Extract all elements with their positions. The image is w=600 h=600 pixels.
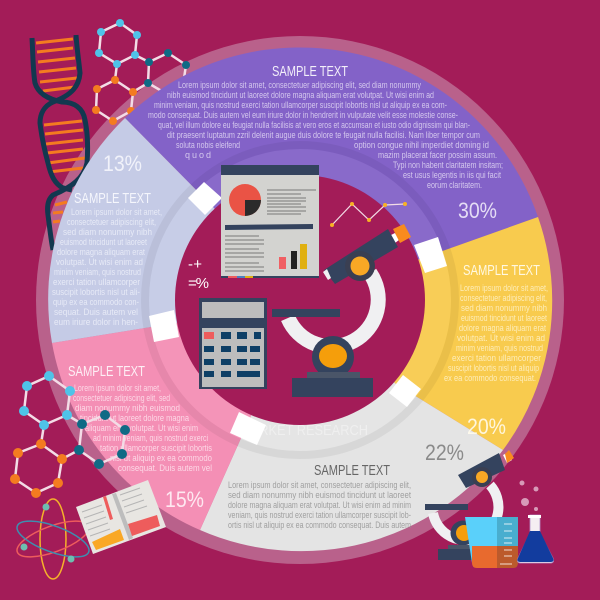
grey body text: sed diam nonummy nibh euismod tincidunt ut laoreet — [228, 490, 411, 500]
yellow heading: SAMPLE TEXT — [463, 262, 540, 279]
lavender body text — [52, 207, 162, 327]
purple body text: quod — [185, 150, 211, 160]
icon: beaker — [465, 517, 518, 568]
yellow body text: exerci tation ullamcorper — [452, 353, 541, 363]
yellow body text: ex ea commodo consequat. — [444, 373, 536, 383]
purple body text: mazim placerat facer possim assum. — [378, 150, 497, 160]
segment: purple 30% — [125, 47, 538, 300]
calculator — [199, 298, 267, 389]
grey body text: ortis nisl ut aliquip ex ea commodo consequat. Duis autem — [228, 520, 411, 530]
grey body text: Lorem ipsum dolor sit amet, consectetuer adipiscing elit, — [228, 480, 411, 490]
pink body text — [73, 383, 212, 473]
lavender body text: minim veniam, quis nostrud — [54, 267, 141, 277]
line chart — [330, 202, 407, 227]
yellow body text — [444, 283, 548, 383]
outer ring — [36, 36, 564, 564]
molecule: top cluster — [92, 19, 190, 125]
purple body text: soluta nobis eleifend — [176, 140, 240, 150]
pink body text: consequat. Duis autem vel — [118, 463, 212, 473]
grey body text: veniam, quis nostrud exerci tation ullamcorper suscipit lob- — [228, 510, 411, 520]
lavender body text: sed diam nonummy nibh — [63, 227, 152, 237]
purple body text: minim veniam, quis nostrud exerci tation ullamcorper suscipit lobortis nisl ut aliquip ex ea com- — [154, 100, 447, 110]
yellow body text: consectetuer adipiscing elit, — [460, 293, 547, 303]
purple body text: est usus legentis in iis qui facit — [403, 170, 501, 180]
pink body text: ad minim veniam, quis nostrud exerci — [93, 433, 208, 443]
percentage 13%: 13% — [103, 151, 142, 176]
purple body text: nibh euismod tincidunt ut laoreet dolore magna aliquam erat volutpat. Ut wisi enim ad — [167, 90, 434, 100]
pink body text: Lorem ipsum dolor sit amet, — [74, 383, 161, 393]
report document — [221, 165, 319, 278]
segment: grey 22% — [200, 300, 503, 551]
segment: pink 15% — [52, 300, 300, 530]
segment: lavender 13% — [48, 118, 300, 343]
grey body text: dolore magna aliquam erat volutpat. Ut wisi enim ad minim — [228, 500, 411, 510]
lavender body text: suscipit lobortis nisl ut ali- — [52, 287, 140, 297]
yellow body text: Lorem ipsum dolor sit amet, — [460, 283, 548, 293]
yellow body text: euismod tincidunt ut laoreet — [461, 313, 547, 323]
purple heading: SAMPLE TEXT — [272, 63, 348, 80]
math symbols: -+ — [188, 256, 202, 273]
percentage 20%: 20% — [467, 414, 506, 439]
icon: large microscope — [272, 224, 411, 397]
market research label: MARKET RESEARCH — [240, 422, 368, 439]
lavender body text: quip ex ea commodo con- — [53, 297, 139, 307]
percentage 30%: 30% — [458, 198, 497, 223]
icon: open book — [76, 480, 166, 554]
lavender heading: SAMPLE TEXT — [74, 190, 151, 207]
icon: small microscope — [425, 450, 514, 560]
connector markers: white diamonds — [149, 182, 447, 445]
yellow body text: sed diam nonummy nibh — [461, 303, 547, 313]
purple body text: dit praesent luptatum zzril delenit augue duis dolore te feugait nulla facilisi. Nam liber tempor cum — [167, 130, 480, 140]
percentage 22%: 22% — [425, 440, 464, 465]
yellow body text: dolore magna aliquam erat — [459, 323, 546, 333]
pink heading: SAMPLE TEXT — [68, 363, 145, 380]
purple body text: Lorem ipsum dolor sit amet, consectetuer adipiscing elit, sed diam nonummy — [178, 80, 421, 90]
lavender body text: Lorem ipsum dolor sit amet, — [71, 207, 162, 217]
segment: yellow 20% — [300, 217, 552, 450]
math symbols — [188, 256, 209, 292]
lavender body text: consectetuer adipiscing elit, — [67, 217, 156, 227]
math symbols: =% — [188, 275, 209, 292]
grey heading: SAMPLE TEXT — [314, 462, 390, 479]
yellow body text: volutpat. Ut wisi enim ad — [457, 333, 545, 343]
yellow body text: suscipit lobortis nisl ut aliquip — [448, 363, 539, 373]
lavender body text: eum iriure dolor in hen- — [54, 317, 138, 327]
icon: atom — [13, 499, 93, 579]
grey body text — [228, 480, 411, 530]
molecule: lower left cluster — [10, 371, 130, 498]
purple body text: eorum claritatem. — [427, 180, 482, 190]
pie chart icon — [229, 184, 261, 216]
icon: flask and bubbles — [517, 480, 554, 563]
purple body text — [148, 80, 503, 190]
lavender body text: euismod tincidunt ut laoreet — [60, 237, 147, 247]
purple body text: quat, vel illum dolore eu feugiat nulla facilisis at vero eros et accumsan et iusto odio dignissim qui blan- — [158, 120, 470, 130]
lavender body text: exerci tation ullamcorper — [53, 277, 140, 287]
bar chart icon — [279, 244, 307, 269]
pink body text: diam nonummy nibh euismod — [75, 403, 180, 413]
purple body text: Typi non habent claritatem insitam; — [393, 160, 503, 170]
purple body text: option congue nihil imperdiet doming id — [354, 140, 489, 150]
centre circle — [175, 175, 425, 425]
pink body text: nisl ut aliquip ex ea commodo — [110, 453, 212, 463]
lavender body text: dolore magna aliquam erat — [57, 247, 145, 257]
pink body text: aliquam erat volutpat. Ut wisi enim — [85, 423, 198, 433]
pink body text: consectetuer adipiscing elit, sed — [73, 393, 170, 403]
lavender body text: volutpat. Ut wisi enim ad — [56, 257, 143, 267]
pink body text: tincidunt ut laoreet dolore magna — [80, 413, 189, 423]
pink body text: tation ullamcorper suscipit lobortis — [100, 443, 212, 453]
lavender body text: sequat. Duis autem vel — [54, 307, 138, 317]
icon: DNA helix — [32, 35, 88, 250]
percentage 15%: 15% — [165, 487, 204, 512]
purple body text: modo consequat. Duis autem vel eum iriure dolor in hendrerit in vulputate velit esse molestie conse- — [148, 110, 458, 120]
yellow body text: minim veniam, quis nostrud — [456, 343, 543, 353]
